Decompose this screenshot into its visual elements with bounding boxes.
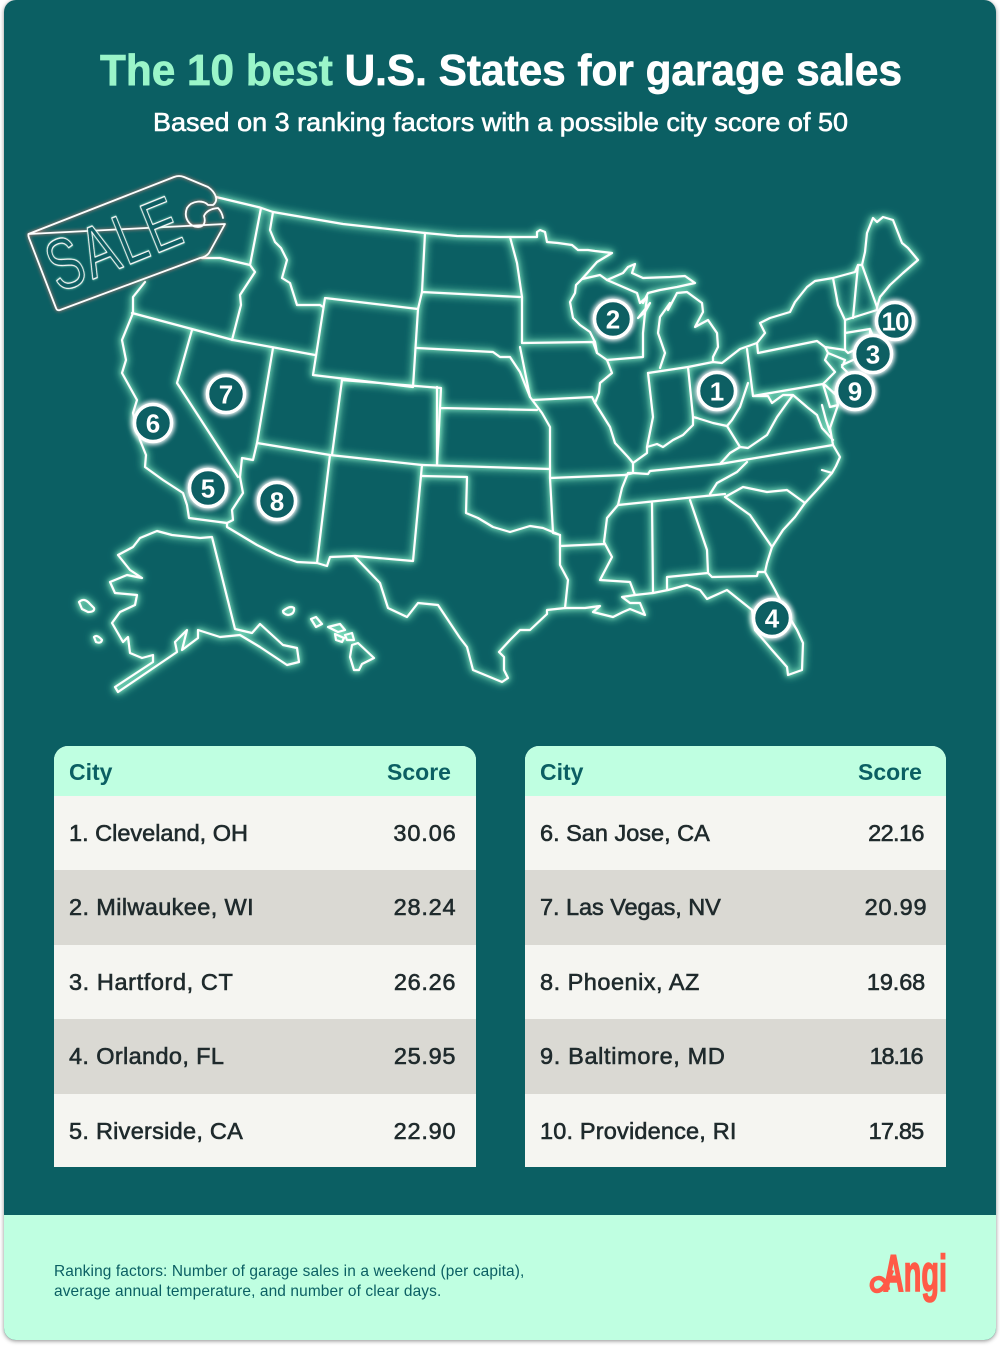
row 10 [540, 1118, 924, 1144]
row 6: 22.16 [868, 820, 924, 846]
marker 4 [754, 600, 790, 636]
marker 10: 10 [882, 306, 909, 336]
ranking factors note [54, 1263, 524, 1300]
tag outline [28, 176, 225, 310]
table header: Score [387, 759, 451, 785]
marker 7: 7 [219, 380, 233, 410]
row 9 [525, 1019, 946, 1094]
row 2 [54, 870, 476, 945]
city markers [134, 300, 914, 636]
row 8: 19.68 [867, 969, 925, 995]
ranking factors note: Ranking factors: Number of garage sales in a weekend (per capita), [54, 1263, 524, 1280]
marker 9: 9 [848, 376, 862, 406]
marker 5: 5 [201, 474, 215, 504]
footer band [4, 1215, 996, 1340]
row 7: 7. Las Vegas, NV [540, 894, 721, 920]
table: cities 1 to 5 [54, 746, 476, 1167]
row 4: 25.95 [394, 1043, 456, 1069]
subtitle: Based on 3 ranking factors with a possible city score of 50 [153, 107, 848, 137]
row 6 [540, 820, 924, 846]
marker 6 [134, 404, 172, 442]
row 4: 4. Orlando, FL [69, 1043, 224, 1069]
row 9: 9. Baltimore, MD [540, 1043, 726, 1069]
row 8 [540, 969, 925, 995]
row 7: 20.99 [865, 894, 927, 920]
marker 3 [854, 336, 892, 372]
row 5 [69, 1118, 456, 1144]
row 3: 26.26 [394, 969, 456, 995]
title: The 10 best U.S. States for garage sales [100, 46, 902, 95]
marker 7 [208, 376, 244, 412]
marker 5 [190, 470, 226, 506]
table header: City [540, 759, 583, 785]
row 2: 2. Milwaukee, WI [69, 894, 254, 920]
map of the United States [79, 197, 918, 692]
row 8: 8. Phoenix, AZ [540, 969, 700, 995]
row 3 [69, 969, 456, 995]
marker 2: 2 [606, 304, 620, 334]
marker 1: 1 [710, 376, 724, 406]
marker 8 [258, 482, 296, 520]
row 1 [69, 820, 457, 846]
ranking factors note: average annual temperature, and number of clear days. [54, 1283, 441, 1300]
row 10: 17.85 [869, 1118, 923, 1144]
table header: Score [858, 759, 922, 785]
row 2: 28.24 [394, 894, 456, 920]
marker 9 [836, 372, 874, 410]
row 5: 5. Riverside, CA [69, 1118, 243, 1144]
marker 3: 3 [866, 340, 880, 370]
row 1: 30.06 [393, 820, 457, 846]
sale price tag [28, 176, 225, 310]
table header [525, 746, 946, 796]
row 3: 3. Hartford, CT [69, 969, 233, 995]
row 1: 1. Cleveland, OH [69, 820, 248, 846]
row 10: 10. Providence, RI [540, 1118, 737, 1144]
row 7 [525, 870, 946, 945]
marker 10 [876, 302, 914, 340]
sale lettering: SALE [35, 183, 192, 308]
marker 2 [594, 300, 632, 338]
marker 1 [698, 372, 736, 410]
marker 8: 8 [270, 486, 284, 516]
Angi logo: Angi [883, 1245, 947, 1303]
row 9: 18.16 [870, 1043, 922, 1069]
row 5: 22.90 [394, 1118, 456, 1144]
Angi logo [872, 1245, 947, 1303]
table header: City [69, 759, 112, 785]
row 4 [54, 1019, 476, 1094]
marker 4: 4 [765, 604, 780, 634]
table: cities 6 to 10 [525, 746, 946, 1167]
marker 6: 6 [146, 408, 160, 438]
table header [54, 746, 476, 796]
row 6: 6. San Jose, CA [540, 820, 710, 846]
